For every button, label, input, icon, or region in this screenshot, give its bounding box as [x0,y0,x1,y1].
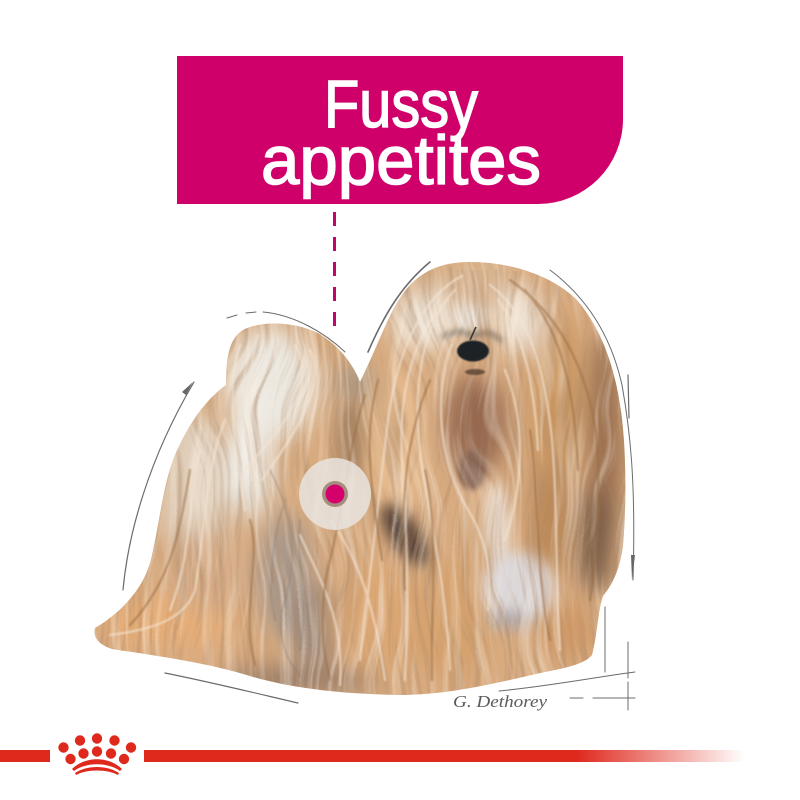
footer rule: left [0,750,50,762]
footer rule: right with fade [144,750,745,762]
marker: target point [299,458,371,530]
hair texture [100,266,626,695]
dog body [94,262,626,695]
illustration: dog [94,262,626,695]
sketch lines around dog [123,262,635,710]
dog face: nose and eyes [457,327,489,375]
title banner [177,56,623,204]
heading: appetites: appetites [261,122,541,199]
signature: G. Dethorey [453,692,548,711]
flowing hair strands [110,276,598,685]
icon: royal crown logo [58,733,136,775]
banner background [177,56,623,204]
heading: Fussy: Fussy [324,67,478,142]
sketch arrowheads [182,382,635,580]
dashed connector [333,212,336,328]
